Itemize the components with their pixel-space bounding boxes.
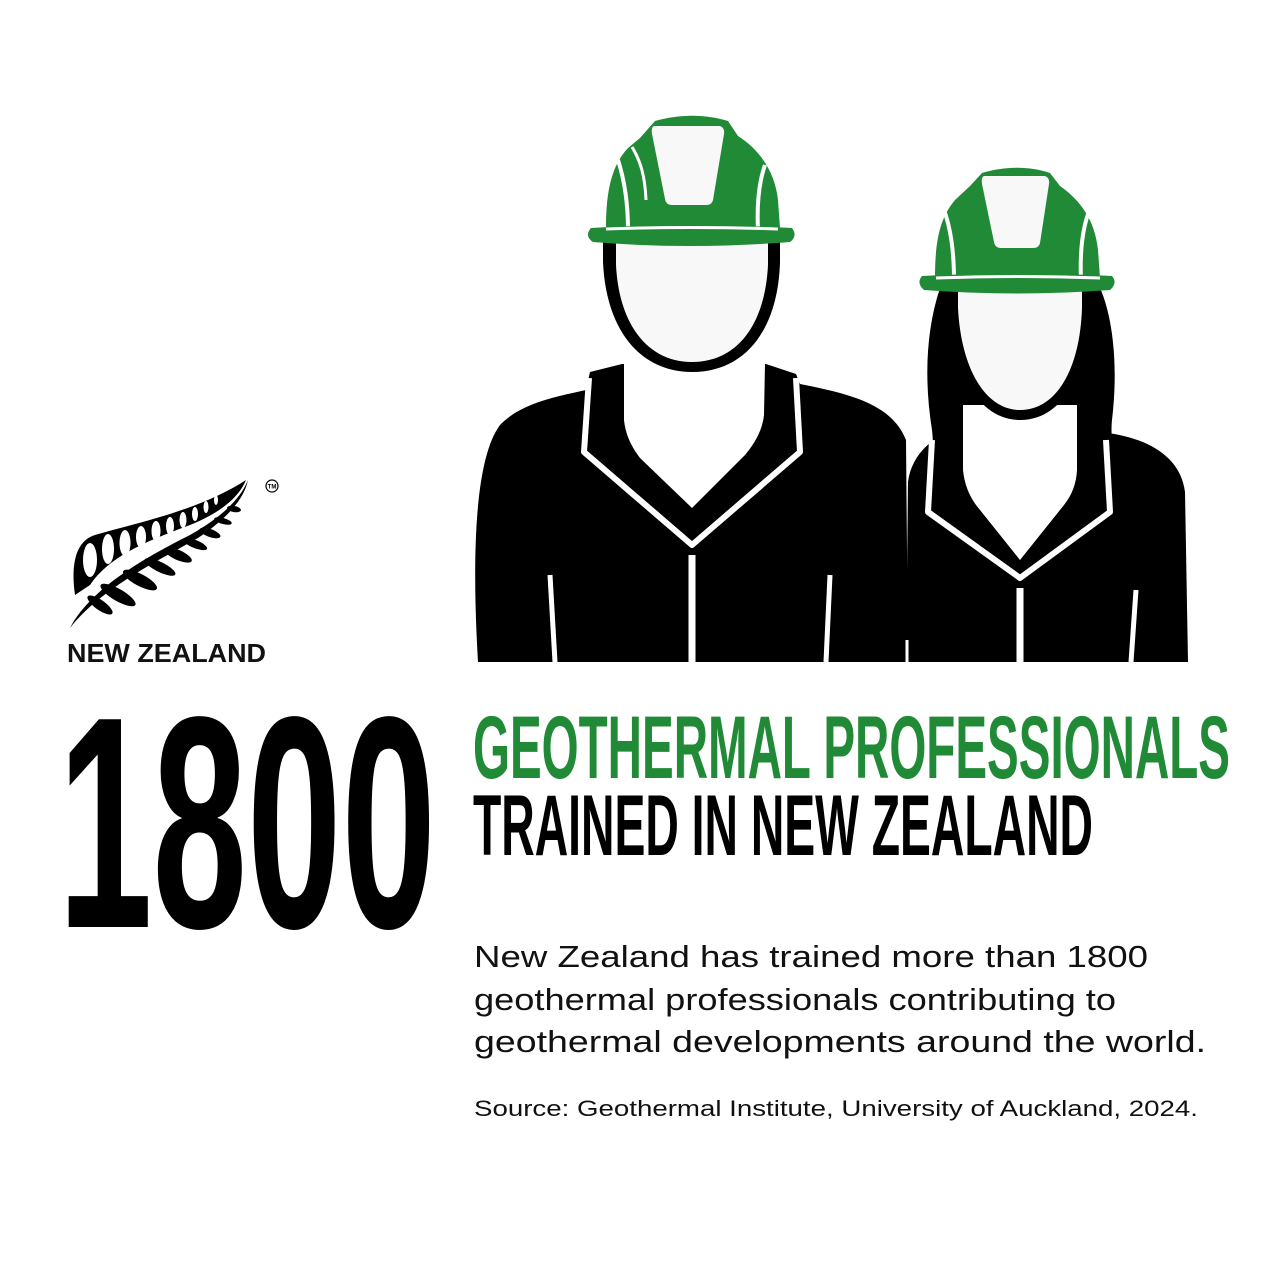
big number 1800: 1800 bbox=[58, 654, 436, 991]
body text: geothermal professionals contributing to bbox=[474, 982, 1116, 1017]
body text bbox=[474, 939, 1206, 1059]
figure: man bbox=[475, 116, 908, 664]
logo: New Zealand fern bbox=[67, 480, 278, 668]
logo: New Zealand fern: TM bbox=[268, 484, 276, 490]
body text: New Zealand has trained more than 1800 bbox=[474, 939, 1148, 974]
source note: Source: Geothermal Institute, University of Auckland, 2024. bbox=[474, 1096, 1198, 1121]
face bbox=[950, 286, 1090, 420]
hard hat bbox=[606, 116, 780, 228]
figure: woman bbox=[906, 168, 1188, 664]
logo: New Zealand fern: NEW ZEALAND bbox=[67, 638, 266, 668]
hard hat bbox=[935, 168, 1100, 278]
body text: geothermal developments around the world. bbox=[474, 1024, 1206, 1059]
face bbox=[603, 236, 780, 372]
